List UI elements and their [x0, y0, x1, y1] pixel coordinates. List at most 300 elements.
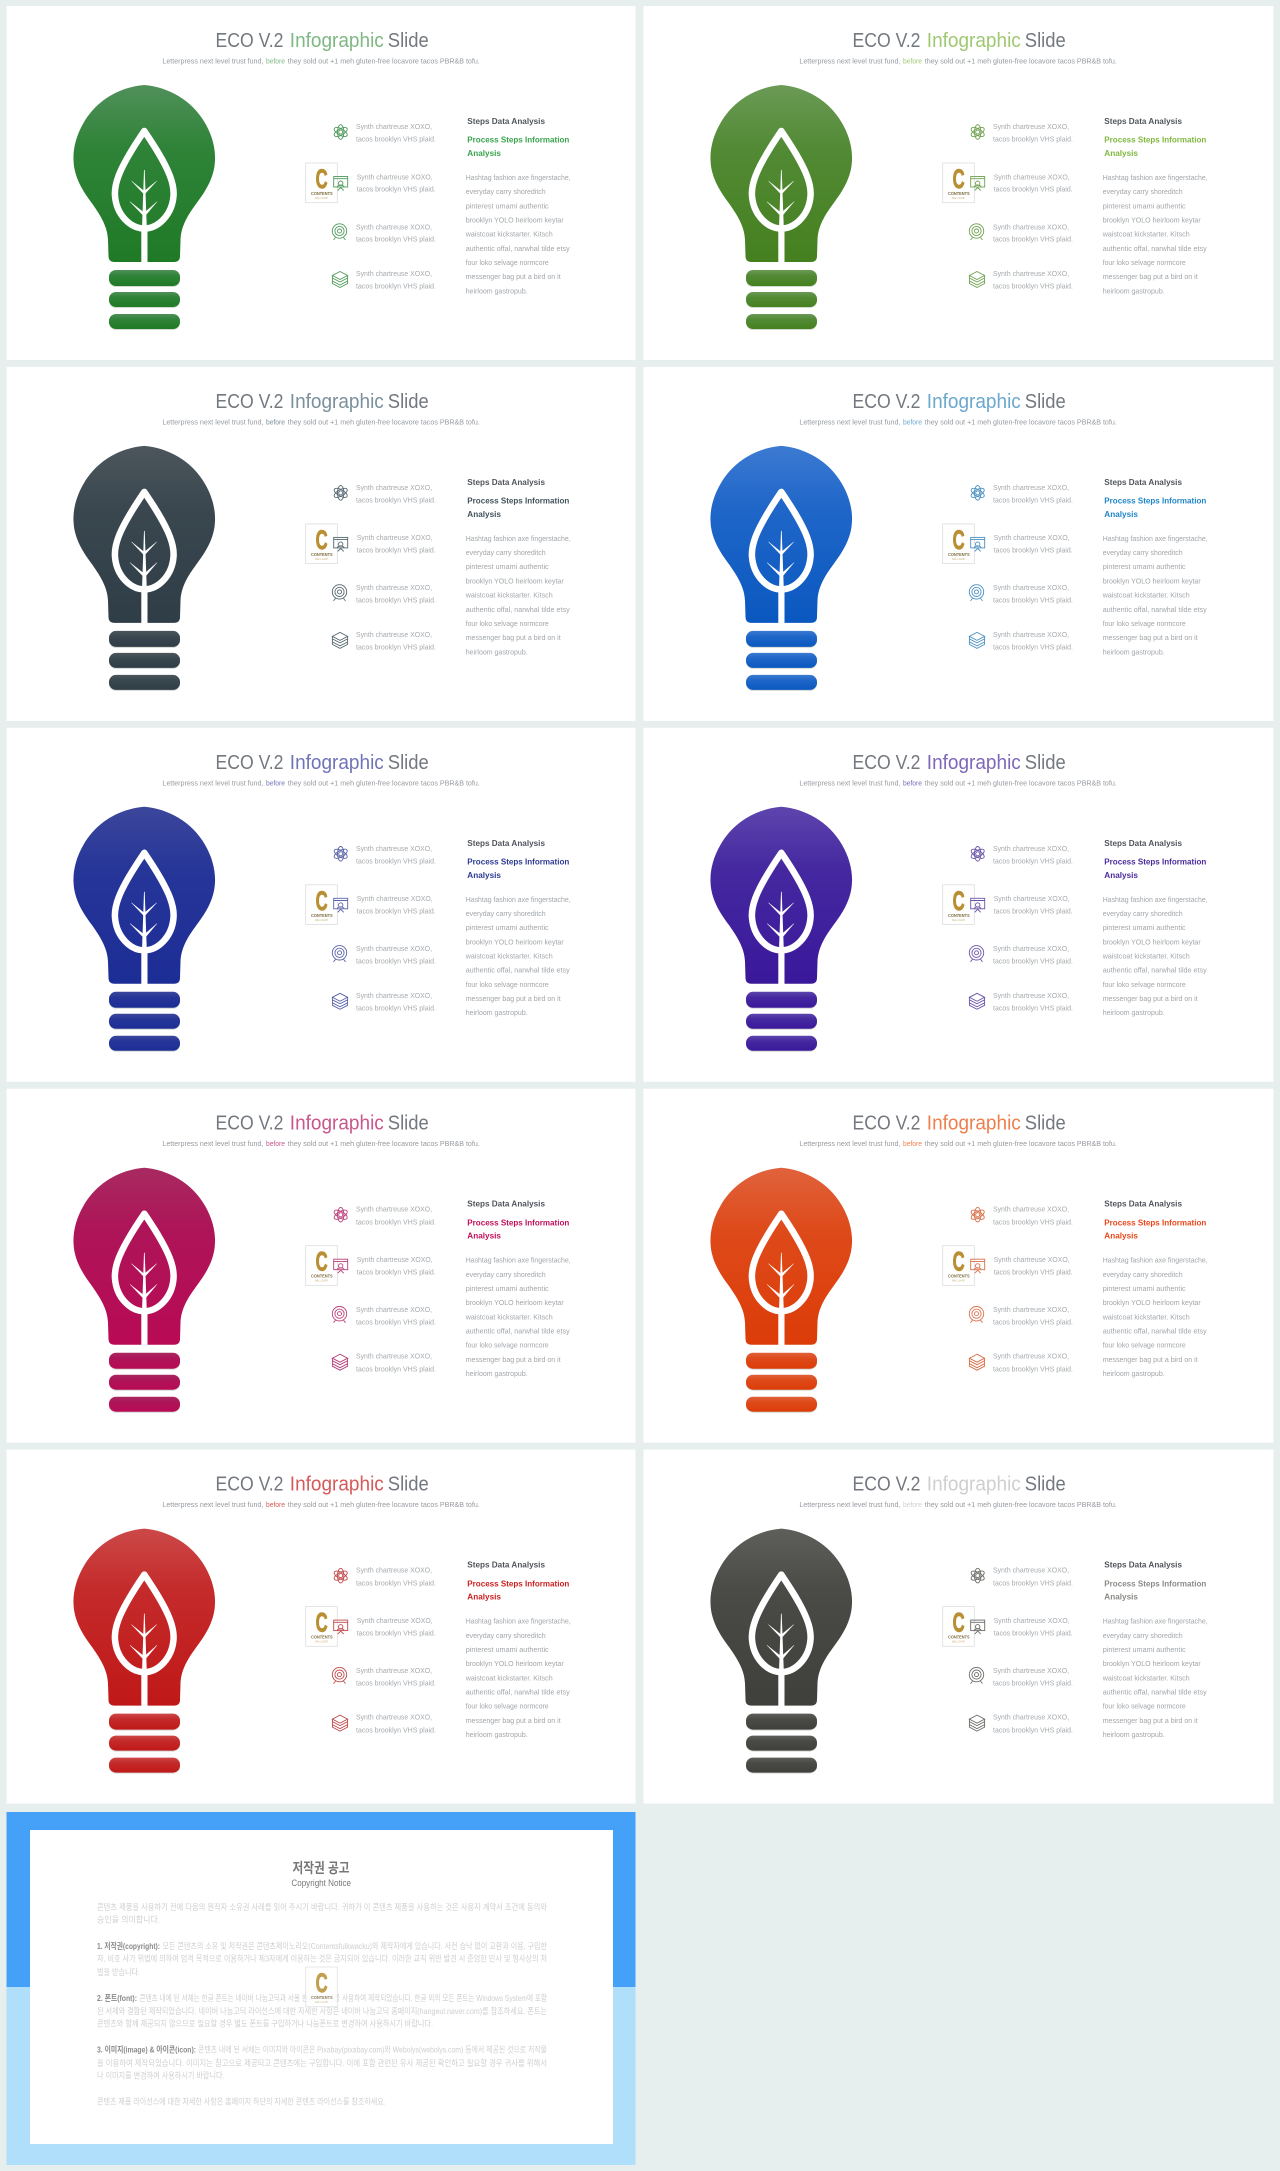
- title: ECO V.2: [216, 391, 284, 413]
- icon: atom: [333, 1207, 349, 1222]
- analysis paragraph: everyday carry shoreditch: [466, 1270, 546, 1279]
- subtitle: before: [903, 1500, 922, 1509]
- subtitle: they sold out +1 meh gluten-free locavore tacos PBR&B tofu.: [288, 56, 480, 66]
- watermark badge: [943, 163, 974, 203]
- analysis headings: Steps Data Analysis: [467, 838, 545, 848]
- watermark badge: MALL SHOP: [952, 1279, 965, 1283]
- step list: Synth chartreuse XOXO,: [356, 844, 432, 853]
- subtitle: before: [903, 56, 922, 66]
- watermark badge: [943, 1607, 974, 1646]
- step list: tacos brooklyn VHS plaid.: [993, 1004, 1073, 1012]
- title: Slide: [388, 752, 429, 774]
- card 10: gray bulb: [644, 1450, 1274, 1804]
- analysis paragraph: pinterest umami authentic: [466, 1645, 549, 1654]
- watermark badge: [306, 163, 337, 203]
- step list: Synth chartreuse XOXO,: [356, 583, 432, 592]
- analysis paragraph: brooklyn YOLO heirloom keytar: [1103, 1298, 1201, 1307]
- intro paragraph: [97, 1902, 547, 1925]
- analysis paragraph: brooklyn YOLO heirloom keytar: [466, 216, 564, 224]
- title: [852, 30, 1066, 52]
- card 2: olive bulb: [644, 6, 1274, 360]
- analysis headings: Process Steps Information: [1104, 496, 1206, 506]
- analysis headings: Analysis: [467, 1231, 501, 1241]
- subtitle: Letterpress next level trust fund,: [162, 778, 263, 787]
- subtitle: they sold out +1 meh gluten-free locavore tacos PBR&B tofu.: [925, 417, 1117, 426]
- icon: layers: [332, 993, 348, 1009]
- step list: tacos brooklyn VHS plaid.: [356, 596, 436, 605]
- step list: [356, 844, 436, 1012]
- step list: Synth chartreuse XOXO,: [356, 1566, 432, 1575]
- analysis paragraph: authentic offal, narwhal tilde etsy: [466, 1327, 570, 1336]
- watermark badge: [306, 524, 337, 564]
- step list: Synth chartreuse XOXO,: [356, 1305, 432, 1314]
- title: Infographic: [927, 30, 1021, 52]
- watermark badge: C: [953, 1247, 965, 1277]
- analysis paragraph: four loko selvage normcore: [466, 1702, 549, 1711]
- analysis paragraph: waistcoat kickstarter. Kitsch: [465, 230, 553, 239]
- light bulb with leaf: [73, 807, 215, 1052]
- step list: Synth chartreuse XOXO,: [994, 1616, 1070, 1625]
- analysis paragraph: pinterest umami authentic: [466, 201, 549, 210]
- analysis paragraph: Hashtag fashion axe fingerstache,: [466, 1617, 571, 1626]
- step list: Synth chartreuse XOXO,: [993, 483, 1069, 492]
- analysis paragraph: brooklyn YOLO heirloom keytar: [466, 937, 564, 946]
- watermark badge: [943, 885, 974, 924]
- analysis paragraph: four loko selvage normcore: [1103, 1341, 1186, 1350]
- analysis paragraph: everyday carry shoreditch: [1103, 909, 1183, 918]
- title: [852, 1474, 1066, 1496]
- step list: Synth chartreuse XOXO,: [357, 533, 433, 542]
- step list: tacos brooklyn VHS plaid.: [993, 643, 1073, 652]
- title: Slide: [1025, 1474, 1066, 1496]
- watermark badge: C: [316, 1968, 328, 1998]
- analysis headings: Process Steps Information: [1104, 1217, 1206, 1227]
- section 3 images and icons: [97, 2045, 547, 2081]
- subtitle: before: [266, 56, 285, 66]
- icon: target: [332, 585, 347, 601]
- analysis paragraph: pinterest umami authentic: [1103, 1284, 1186, 1293]
- step list: tacos brooklyn VHS plaid.: [356, 1725, 436, 1734]
- step list: tacos brooklyn VHS plaid.: [356, 496, 436, 505]
- step list: tacos brooklyn VHS plaid.: [356, 1217, 436, 1226]
- light bulb with leaf: [710, 1529, 852, 1774]
- card 1: green bulb: [6, 6, 636, 360]
- analysis paragraph: four loko selvage normcore: [1103, 980, 1186, 989]
- watermark badge: C: [316, 164, 328, 194]
- card 7: crimson bulb: [6, 1089, 636, 1443]
- step list: tacos brooklyn VHS plaid.: [356, 1678, 436, 1687]
- step list: Synth chartreuse XOXO,: [356, 1205, 432, 1214]
- icon: atom: [970, 846, 986, 861]
- light bulb with leaf: [710, 85, 852, 330]
- analysis headings: Analysis: [467, 870, 501, 880]
- title: [216, 752, 429, 774]
- step list: Synth chartreuse XOXO,: [356, 483, 432, 492]
- icon: presentation: [971, 898, 985, 912]
- subtitle: [799, 1500, 1117, 1509]
- step list: [993, 1205, 1073, 1373]
- step list: tacos brooklyn VHS plaid.: [993, 282, 1073, 291]
- notice subtitle: Copyright Notice: [291, 1878, 351, 1888]
- analysis paragraph: authentic offal, narwhal tilde etsy: [466, 1687, 570, 1696]
- analysis paragraph: everyday carry shoreditch: [466, 187, 546, 196]
- analysis paragraph: everyday carry shoreditch: [466, 1631, 546, 1640]
- watermark badge: CONTENTS: [311, 913, 333, 918]
- analysis paragraph: everyday carry shoreditch: [1103, 1631, 1183, 1640]
- analysis headings: Steps Data Analysis: [1104, 838, 1182, 848]
- title: Slide: [1025, 30, 1066, 52]
- analysis headings: Steps Data Analysis: [467, 116, 545, 126]
- title: ECO V.2: [852, 1113, 920, 1135]
- watermark badge: MALL SHOP: [952, 196, 965, 200]
- step list: Synth chartreuse XOXO,: [356, 630, 432, 639]
- icon: presentation: [334, 176, 348, 190]
- watermark badge: MALL SHOP: [315, 196, 328, 200]
- watermark badge: MALL SHOP: [315, 2000, 328, 2004]
- icon: target: [969, 946, 984, 962]
- step list: tacos brooklyn VHS plaid.: [993, 1678, 1073, 1687]
- watermark badge: C: [316, 1608, 328, 1638]
- card 8: orange bulb: [644, 1089, 1274, 1443]
- analysis paragraph: four loko selvage normcore: [1103, 619, 1186, 628]
- analysis paragraph: Hashtag fashion axe fingerstache,: [466, 534, 571, 543]
- step list: Synth chartreuse XOXO,: [994, 1255, 1070, 1264]
- watermark badge: [306, 885, 337, 924]
- analysis paragraph: waistcoat kickstarter. Kitsch: [1102, 1312, 1190, 1321]
- icon: presentation: [334, 1259, 348, 1273]
- title: [852, 391, 1066, 413]
- icon: target: [332, 1667, 347, 1684]
- step list: tacos brooklyn VHS plaid.: [356, 135, 436, 144]
- title: Infographic: [927, 391, 1021, 413]
- step list: [356, 122, 436, 291]
- analysis headings: Analysis: [1104, 870, 1138, 880]
- subtitle: [799, 1139, 1117, 1148]
- step list: Synth chartreuse XOXO,: [993, 1205, 1069, 1214]
- analysis headings: [467, 838, 569, 880]
- step list: tacos brooklyn VHS plaid.: [357, 1628, 436, 1637]
- icon: layers: [969, 632, 985, 648]
- subtitle: before: [266, 417, 285, 426]
- subtitle: [799, 778, 1117, 787]
- analysis paragraph: brooklyn YOLO heirloom keytar: [466, 1298, 564, 1307]
- analysis paragraph: four loko selvage normcore: [466, 980, 549, 989]
- analysis paragraph: everyday carry shoreditch: [466, 909, 546, 918]
- analysis paragraph: everyday carry shoreditch: [1103, 548, 1183, 557]
- analysis paragraph: messenger bag put a bird on it: [1103, 272, 1199, 281]
- analysis paragraph: messenger bag put a bird on it: [466, 994, 562, 1003]
- section 1 copyright: 벌을 받습니다.: [97, 1967, 140, 1977]
- step list: tacos brooklyn VHS plaid.: [356, 235, 436, 244]
- icon: presentation: [971, 537, 985, 551]
- card 4: blue bulb: [644, 367, 1274, 721]
- analysis paragraph: four loko selvage normcore: [466, 619, 549, 628]
- analysis paragraph: pinterest umami authentic: [466, 923, 549, 932]
- analysis headings: Steps Data Analysis: [1104, 1199, 1182, 1209]
- analysis paragraph: messenger bag put a bird on it: [466, 1355, 562, 1364]
- analysis paragraph: waistcoat kickstarter. Kitsch: [465, 951, 553, 960]
- analysis paragraph: messenger bag put a bird on it: [1103, 1355, 1199, 1364]
- title: [216, 30, 429, 52]
- step list: tacos brooklyn VHS plaid.: [357, 185, 436, 194]
- analysis headings: Process Steps Information: [1104, 135, 1206, 145]
- closing line: 콘텐츠 제품 라이선스에 대한 자세한 사항은 홈페이지 하단의 자세한 콘텐츠 라이선스를 참조하세요.: [97, 2097, 386, 2107]
- analysis paragraph: Hashtag fashion axe fingerstache,: [466, 173, 571, 182]
- icon: layers: [332, 1354, 348, 1370]
- section 1 copyright: 모든 콘텐츠의 소유 및 저작권은 콘텐츠제이노리오(Contentsfulkwacku)와 제작자에게 있습니다. 사전 승낙 없이 교환과 이용, 구입한: [162, 1941, 547, 1951]
- analysis paragraph: heirloom gastropub.: [1103, 1730, 1165, 1739]
- title: ECO V.2: [216, 1113, 284, 1135]
- section 2 font: 콘텐츠 내에 된 서체는 한글 폰트는 네이버 나눔고딕과 서울 한강체 서체를 사용하여 제작되었습니다. 한글 외의 모든 폰트는 Windows System에 포함: [140, 1993, 547, 2003]
- subtitle: [799, 417, 1117, 426]
- intro paragraph: 승인을 의미합니다.: [97, 1915, 160, 1925]
- subtitle: [162, 417, 480, 426]
- step list: tacos brooklyn VHS plaid.: [993, 1725, 1073, 1734]
- watermark badge: [943, 1246, 974, 1285]
- step list: Synth chartreuse XOXO,: [356, 1713, 432, 1722]
- step list: tacos brooklyn VHS plaid.: [356, 1578, 436, 1587]
- step list: tacos brooklyn VHS plaid.: [993, 1578, 1073, 1587]
- step list: Synth chartreuse XOXO,: [993, 991, 1069, 1000]
- title: ECO V.2: [852, 1474, 920, 1496]
- title: Slide: [388, 391, 429, 413]
- subtitle: they sold out +1 meh gluten-free locavore tacos PBR&B tofu.: [925, 778, 1117, 787]
- watermark badge: CONTENTS: [948, 913, 970, 918]
- watermark badge: CONTENTS: [311, 1635, 333, 1640]
- analysis paragraph: pinterest umami authentic: [1103, 562, 1186, 571]
- card 6: purple bulb: [644, 728, 1274, 1082]
- analysis paragraph: [465, 173, 571, 295]
- icon: atom: [970, 486, 986, 500]
- analysis paragraph: messenger bag put a bird on it: [466, 272, 562, 281]
- watermark badge: CONTENTS: [948, 191, 970, 196]
- title: [852, 1113, 1066, 1135]
- analysis headings: [1104, 1560, 1206, 1602]
- analysis paragraph: brooklyn YOLO heirloom keytar: [1103, 1659, 1201, 1668]
- icon: target: [969, 224, 984, 240]
- watermark badge: C: [953, 525, 965, 555]
- icon: layers: [332, 632, 348, 648]
- analysis headings: Steps Data Analysis: [1104, 477, 1182, 487]
- analysis headings: [467, 1199, 569, 1241]
- step list: tacos brooklyn VHS plaid.: [356, 1004, 436, 1012]
- subtitle: before: [903, 417, 922, 426]
- analysis paragraph: heirloom gastropub.: [466, 1730, 528, 1739]
- subtitle: they sold out +1 meh gluten-free locavore tacos PBR&B tofu.: [925, 1500, 1117, 1509]
- title: [852, 752, 1066, 774]
- step list: tacos brooklyn VHS plaid.: [356, 956, 436, 965]
- step list: tacos brooklyn VHS plaid.: [994, 546, 1073, 555]
- title: ECO V.2: [216, 1474, 284, 1496]
- step list: tacos brooklyn VHS plaid.: [993, 1317, 1073, 1326]
- title: [216, 1113, 429, 1135]
- title: ECO V.2: [852, 752, 920, 774]
- title: Slide: [388, 1474, 429, 1496]
- step list: Synth chartreuse XOXO,: [357, 172, 433, 181]
- analysis headings: [1104, 838, 1206, 880]
- icon: presentation: [971, 1620, 985, 1634]
- analysis paragraph: [1102, 895, 1208, 1017]
- section 2 font: 콘텐츠와 함께 제공되지 않으므로 필요할 경우 별도 폰트를 구입하거나 나눔폰트로 변경하여 사용하시기 바랍니다.: [97, 2019, 433, 2029]
- subtitle: [162, 778, 480, 787]
- analysis paragraph: heirloom gastropub.: [466, 647, 528, 656]
- icon: presentation: [971, 176, 985, 190]
- watermark badge: MALL SHOP: [315, 1640, 328, 1644]
- icon: target: [969, 585, 984, 601]
- step list: tacos brooklyn VHS plaid.: [993, 956, 1073, 965]
- title: Infographic: [290, 391, 384, 413]
- analysis paragraph: Hashtag fashion axe fingerstache,: [466, 1256, 571, 1265]
- step list: Synth chartreuse XOXO,: [993, 944, 1069, 953]
- subtitle: they sold out +1 meh gluten-free locavore tacos PBR&B tofu.: [288, 1500, 480, 1509]
- subtitle: Letterpress next level trust fund,: [162, 417, 263, 426]
- step list: tacos brooklyn VHS plaid.: [356, 1317, 436, 1326]
- step list: tacos brooklyn VHS plaid.: [993, 856, 1073, 865]
- subtitle: they sold out +1 meh gluten-free locavore tacos PBR&B tofu.: [288, 417, 480, 426]
- analysis paragraph: pinterest umami authentic: [466, 562, 549, 571]
- analysis paragraph: Hashtag fashion axe fingerstache,: [1103, 1617, 1208, 1626]
- card 9: red bulb: [6, 1450, 636, 1804]
- analysis headings: Steps Data Analysis: [467, 1560, 545, 1570]
- subtitle: [799, 56, 1117, 66]
- subtitle: they sold out +1 meh gluten-free locavore tacos PBR&B tofu.: [288, 778, 480, 787]
- analysis paragraph: [1102, 173, 1208, 295]
- notice title: 저작권 공고: [292, 1860, 350, 1876]
- subtitle: they sold out +1 meh gluten-free locavore tacos PBR&B tofu.: [288, 1139, 480, 1148]
- watermark badge: C: [953, 1608, 965, 1638]
- title: Infographic: [927, 752, 1021, 774]
- subtitle: [162, 1139, 480, 1148]
- light bulb with leaf: [710, 807, 852, 1052]
- title: Slide: [1025, 752, 1066, 774]
- title: Infographic: [927, 1113, 1021, 1135]
- step list: tacos brooklyn VHS plaid.: [993, 1217, 1073, 1226]
- icon: atom: [970, 125, 986, 139]
- icon: target: [332, 946, 347, 962]
- light bulb with leaf: [73, 446, 215, 691]
- subtitle: Letterpress next level trust fund,: [799, 417, 900, 426]
- analysis paragraph: messenger bag put a bird on it: [466, 633, 562, 642]
- title: Infographic: [290, 1474, 384, 1496]
- step list: tacos brooklyn VHS plaid.: [993, 496, 1073, 505]
- analysis paragraph: heirloom gastropub.: [466, 1369, 528, 1378]
- watermark badge: CONTENTS: [311, 1274, 333, 1279]
- analysis headings: [1104, 116, 1206, 158]
- step list: tacos brooklyn VHS plaid.: [993, 1364, 1073, 1373]
- analysis paragraph: [465, 895, 571, 1017]
- step list: Synth chartreuse XOXO,: [993, 583, 1069, 592]
- icon: atom: [333, 1568, 349, 1583]
- step list: Synth chartreuse XOXO,: [993, 222, 1069, 231]
- card 5: navy bulb: [6, 728, 636, 1082]
- analysis paragraph: four loko selvage normcore: [1103, 1702, 1186, 1711]
- watermark badge: CONTENTS: [311, 1995, 333, 2000]
- subtitle: they sold out +1 meh gluten-free locavore tacos PBR&B tofu.: [925, 56, 1117, 66]
- subtitle: [162, 1500, 480, 1509]
- analysis paragraph: waistcoat kickstarter. Kitsch: [465, 591, 553, 600]
- icon: layers: [969, 1715, 985, 1731]
- step list: Synth chartreuse XOXO,: [993, 1666, 1069, 1675]
- card 3: slate bulb: [6, 367, 636, 721]
- step list: Synth chartreuse XOXO,: [994, 533, 1070, 542]
- intro paragraph: 콘텐츠 제품을 사용하기 전에 다음의 원작자 소유권 사례를 읽어 주시기 바랍니다. 귀하가 이 콘텐츠 제품을 사용하는 것은 사용자 계약서 조건에 동의와: [97, 1902, 547, 1912]
- icon: layers: [969, 993, 985, 1009]
- step list: Synth chartreuse XOXO,: [993, 630, 1069, 639]
- step list: tacos brooklyn VHS plaid.: [993, 235, 1073, 244]
- light bulb with leaf: [73, 1529, 215, 1774]
- step list: Synth chartreuse XOXO,: [356, 222, 432, 231]
- analysis paragraph: pinterest umami authentic: [1103, 1645, 1186, 1654]
- section 3 images and icons: 콘텐츠 내에 된 서체는 이미지와 아이콘은 Pixabay(pixabay.com)와 Webolys(webolys.com) 등에서 제공된 것으로 저작물: [198, 2045, 547, 2055]
- analysis paragraph: authentic offal, narwhal tilde etsy: [1103, 244, 1207, 253]
- section 1 copyright: [97, 1941, 547, 1977]
- analysis headings: Analysis: [1104, 148, 1138, 158]
- watermark badge: MALL SHOP: [952, 918, 965, 922]
- watermark badge: C: [953, 164, 965, 194]
- analysis headings: Analysis: [1104, 1231, 1138, 1241]
- title: ECO V.2: [852, 30, 920, 52]
- analysis paragraph: waistcoat kickstarter. Kitsch: [1102, 230, 1190, 239]
- watermark badge: MALL SHOP: [952, 557, 965, 561]
- icon: layers: [332, 1715, 348, 1731]
- analysis paragraph: authentic offal, narwhal tilde etsy: [466, 966, 570, 975]
- icon: target: [969, 1667, 984, 1684]
- step list: Synth chartreuse XOXO,: [993, 269, 1069, 278]
- step list: tacos brooklyn VHS plaid.: [356, 856, 436, 865]
- title: ECO V.2: [216, 752, 284, 774]
- analysis paragraph: authentic offal, narwhal tilde etsy: [1103, 966, 1207, 975]
- icon: layers: [969, 272, 985, 288]
- light bulb with leaf: [710, 1168, 852, 1413]
- step list: Synth chartreuse XOXO,: [356, 1352, 432, 1361]
- copyright notice panel: [6, 1812, 636, 2165]
- title: Slide: [1025, 1113, 1066, 1135]
- analysis headings: Process Steps Information: [467, 135, 569, 145]
- step list: tacos brooklyn VHS plaid.: [994, 1267, 1073, 1276]
- analysis paragraph: waistcoat kickstarter. Kitsch: [1102, 1673, 1190, 1682]
- step list: Synth chartreuse XOXO,: [993, 1566, 1069, 1575]
- section 3 images and icons: 을 이용하여 제작되었습니다. 이미지는 참고으로 제공되고 콘텐츠에는 구입합니다. 이에 포함 관련된 유사 제공된 확인하고 필요할 경우 귀사를 위해서: [97, 2058, 547, 2068]
- step list: Synth chartreuse XOXO,: [993, 1352, 1069, 1361]
- section 2 font: [97, 1993, 547, 2029]
- analysis paragraph: [465, 1617, 571, 1739]
- step list: Synth chartreuse XOXO,: [993, 844, 1069, 853]
- analysis paragraph: heirloom gastropub.: [1103, 1369, 1165, 1378]
- analysis headings: Analysis: [1104, 1592, 1138, 1602]
- step list: [356, 483, 436, 652]
- subtitle: Letterpress next level trust fund,: [799, 1500, 900, 1509]
- icon: target: [969, 1306, 984, 1323]
- analysis paragraph: everyday carry shoreditch: [1103, 187, 1183, 196]
- step list: Synth chartreuse XOXO,: [357, 894, 433, 903]
- analysis paragraph: messenger bag put a bird on it: [466, 1716, 562, 1725]
- step list: tacos brooklyn VHS plaid.: [994, 906, 1073, 915]
- analysis paragraph: heirloom gastropub.: [1103, 286, 1165, 295]
- analysis paragraph: [465, 1256, 571, 1378]
- icon: atom: [333, 846, 349, 861]
- section 1 copyright: 1. 저작권(copyright):: [97, 1941, 160, 1951]
- analysis headings: Steps Data Analysis: [1104, 1560, 1182, 1570]
- step list: Synth chartreuse XOXO,: [994, 894, 1070, 903]
- watermark badge: MALL SHOP: [315, 557, 328, 561]
- subtitle: before: [266, 1500, 285, 1509]
- watermark badge: [306, 1246, 337, 1285]
- analysis headings: Process Steps Information: [467, 1578, 569, 1588]
- watermark badge: C: [316, 525, 328, 555]
- icon: atom: [970, 1207, 986, 1222]
- icon: atom: [970, 1568, 986, 1583]
- analysis paragraph: everyday carry shoreditch: [1103, 1270, 1183, 1279]
